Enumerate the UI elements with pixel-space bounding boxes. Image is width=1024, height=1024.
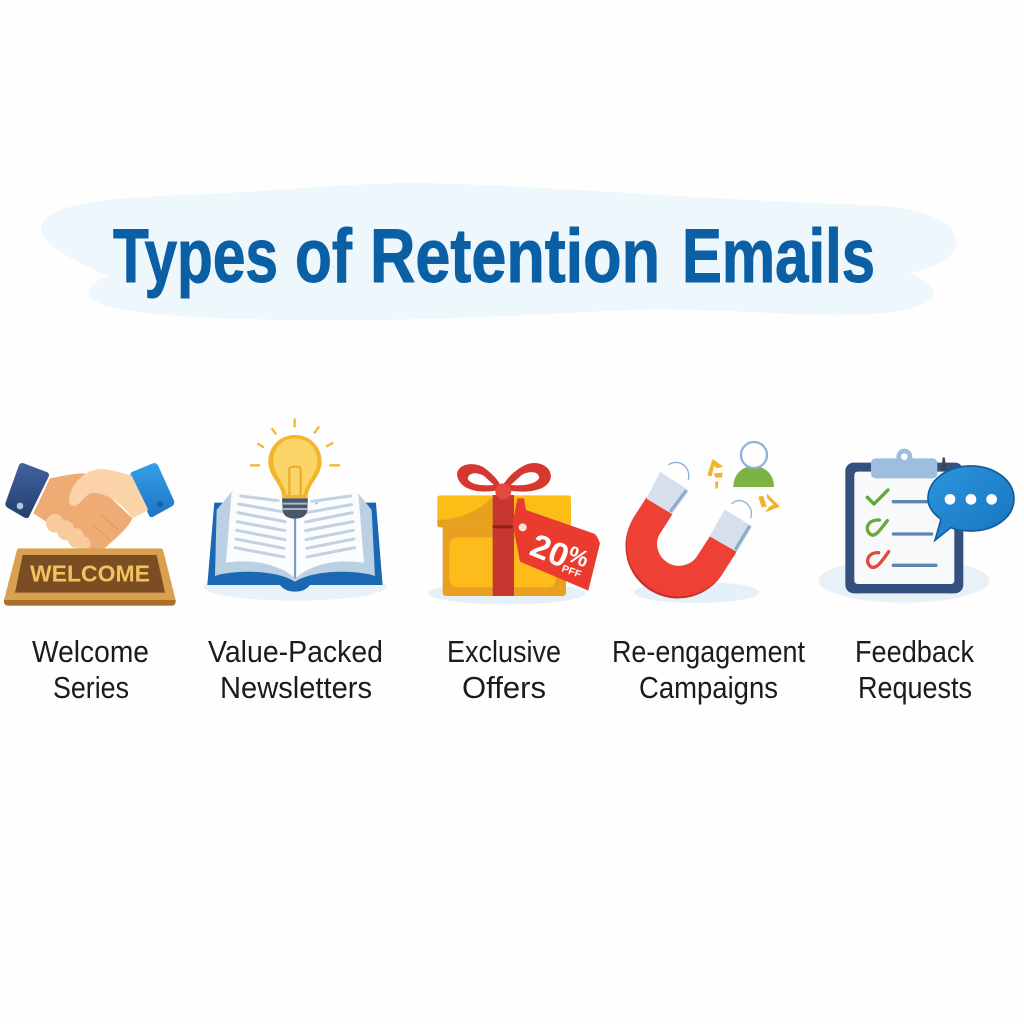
icon: open book with light bulb — [203, 418, 387, 601]
magnet tips — [648, 473, 688, 513]
tag text — [525, 526, 593, 581]
plate frame — [4, 548, 176, 606]
label: Re-engagement Campaigns: Re-engagement — [612, 634, 805, 669]
book shadow — [203, 573, 387, 601]
clip — [871, 449, 937, 478]
right cuff — [130, 463, 174, 517]
magnet body — [641, 507, 723, 583]
light rays — [250, 418, 340, 465]
label: Welcome Series: Series — [53, 670, 129, 705]
bubble dots — [945, 494, 997, 505]
icon: magnet attracting user — [634, 442, 780, 603]
bulb base — [282, 498, 308, 519]
label: Exclusive Offers: Exclusive — [447, 634, 561, 669]
title banner: Emails — [682, 214, 875, 299]
label: Value-Packed Newsletters: Newsletters — [220, 670, 372, 705]
left page — [226, 492, 294, 578]
title banner: of — [295, 214, 353, 299]
welcome text: WELCOME — [30, 561, 150, 587]
checklist lines — [893, 502, 936, 565]
bow — [457, 463, 551, 492]
ribbon — [493, 495, 514, 596]
front hand — [69, 469, 148, 518]
bulb glass — [268, 435, 322, 498]
discount tag — [513, 498, 600, 591]
label: Feedback Requests: Feedback — [855, 634, 974, 669]
fingers — [46, 514, 91, 552]
sparks — [707, 459, 780, 512]
check marks — [867, 490, 889, 567]
label: Value-Packed Newsletters: Value-Packed — [208, 634, 383, 669]
magnet shadow — [634, 582, 759, 603]
tag text: % — [564, 541, 593, 572]
label: Feedback Requests: Requests — [858, 670, 972, 705]
label: Welcome Series: Welcome — [32, 634, 149, 669]
paper — [854, 472, 954, 584]
plate inner panel — [15, 555, 165, 593]
user figure — [733, 466, 774, 487]
title banner — [41, 183, 957, 320]
label: Value-Packed Newsletters — [208, 634, 383, 705]
icon: clipboard checklist with speech bubble — [819, 449, 1014, 603]
page text lines — [235, 496, 355, 557]
label: Welcome Series — [32, 634, 149, 705]
box body — [443, 525, 566, 596]
title banner: Types — [113, 214, 278, 299]
clipboard board — [845, 463, 963, 593]
tag text: PFF — [560, 563, 583, 581]
page stack — [215, 492, 375, 582]
tag text: 20 — [525, 526, 574, 575]
gift shadow — [428, 582, 585, 604]
label: Feedback Requests — [855, 634, 974, 705]
spine — [292, 517, 298, 578]
icon: handshake on welcome plate — [4, 463, 176, 606]
label: Re-engagement Campaigns: Campaigns — [639, 670, 778, 705]
icon: gift box with discount tag — [428, 463, 600, 604]
right page — [296, 493, 364, 578]
label: Exclusive Offers — [447, 634, 561, 705]
title banner: Retention — [370, 214, 660, 299]
speech bubble — [928, 466, 1014, 540]
pen tip — [941, 457, 947, 470]
book cover — [207, 503, 383, 592]
left cuff — [5, 463, 49, 518]
field arcs — [668, 462, 751, 518]
label: Exclusive Offers: Offers — [462, 670, 546, 705]
label: Re-engagement Campaigns — [612, 634, 805, 705]
clipboard shadow — [819, 559, 989, 603]
box lid — [437, 495, 571, 527]
back hand — [33, 473, 132, 551]
